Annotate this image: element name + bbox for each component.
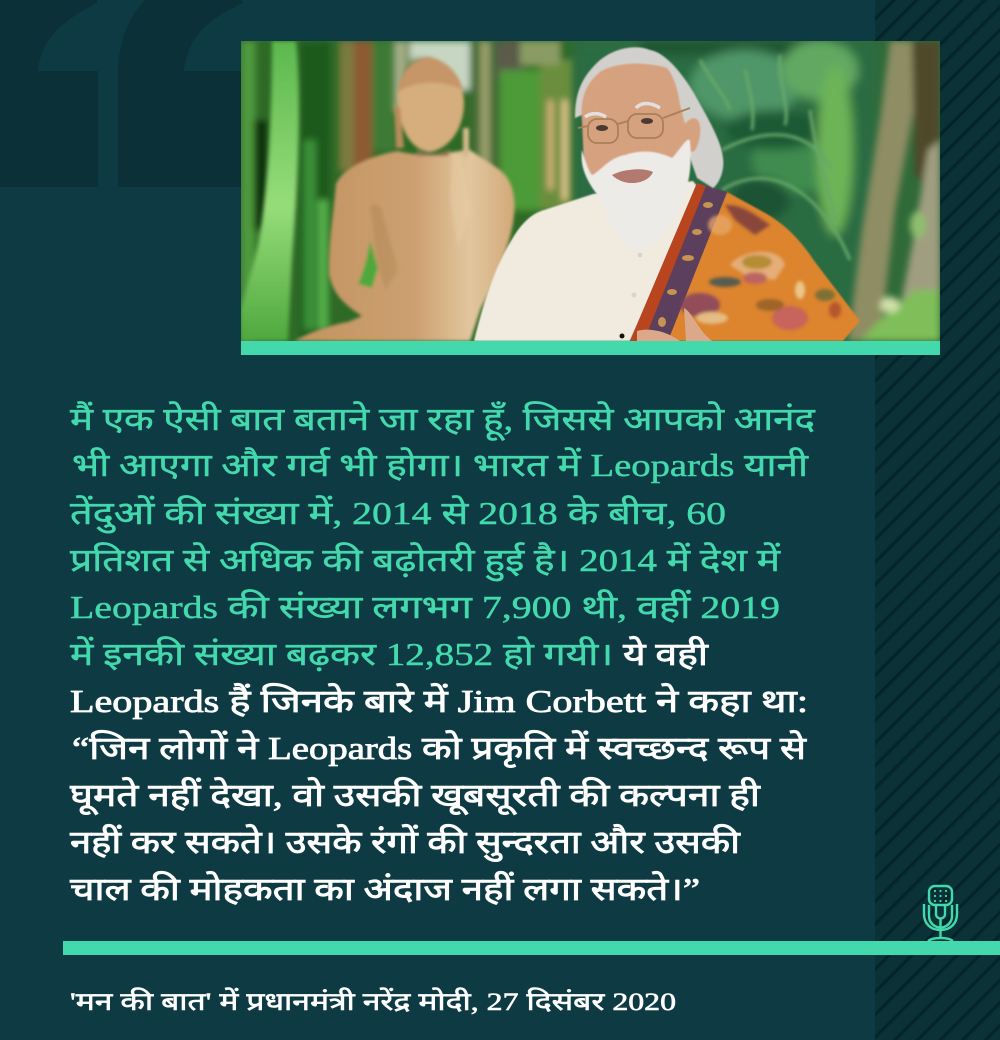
line 1: मैं एक ऐसी बात बताने जा रहा हूँ, जिससे आपको आनंद bbox=[70, 401, 816, 441]
man in white kurta and orange shawl bbox=[474, 47, 860, 341]
striped right band bbox=[875, 0, 1000, 1040]
quote text: green bbox=[70, 401, 816, 672]
line 3: तेंदुओं की संख्या में, 2014 से 2018 के बीच, 60 bbox=[70, 495, 726, 534]
Buddha statue bbox=[294, 57, 514, 341]
hair bbox=[575, 47, 723, 188]
foliage fronds bbox=[700, 55, 850, 260]
bright green trunk bbox=[241, 41, 299, 341]
line 9: घूमते नहीं देखा, वो उसकी खूबसूरती की कल्पना ही bbox=[70, 777, 761, 815]
shawl embroidery bbox=[680, 205, 841, 330]
attribution: 'मन की बात' में प्रधानमंत्री नरेंद्र मोदी, 27 दिसंबर 2020 bbox=[70, 987, 676, 1016]
footer divider bar bbox=[63, 941, 1000, 955]
line 6: में इनकी संख्या बढ़कर 12,852 हो गयी। ये वही bbox=[70, 636, 709, 672]
face bbox=[580, 62, 701, 176]
line 4: प्रतिशत से अधिक की बढ़ोतरी हुई है। 2014 में देश में bbox=[70, 542, 781, 582]
line 11: चाल की मोहकता का अंदाज नहीं लगा सकते।” bbox=[70, 871, 700, 907]
beard bbox=[582, 140, 691, 249]
line 7: Leopards हैं जिनके बारे में Jim Corbett ने कहा था: bbox=[70, 683, 808, 719]
photo underline bar bbox=[241, 341, 940, 355]
blurred forest backdrop bbox=[241, 41, 574, 341]
icon: microphone bbox=[924, 886, 957, 941]
mouth bbox=[612, 169, 653, 183]
line 5: Leopards की संख्या लगभग 7,900 थी, वहीं 2019 bbox=[70, 589, 780, 625]
photo: Prime Minister with Buddha statue bbox=[241, 40, 940, 341]
quote text: white bbox=[70, 683, 808, 907]
line 8: “जिन लोगों ने Leopards को प्रकृति में स्वच्छन्द रूप से bbox=[72, 730, 808, 768]
line 10: नहीं कर सकते। उसके रंगों की सुन्दरता और उसकी bbox=[70, 824, 741, 862]
decorative quotation mark bbox=[0, 0, 243, 187]
line 2: भी आएगा और गर्व भी होगा। भारत में Leopards यानी bbox=[72, 447, 809, 483]
glasses bbox=[578, 108, 690, 143]
hand bbox=[637, 330, 680, 341]
